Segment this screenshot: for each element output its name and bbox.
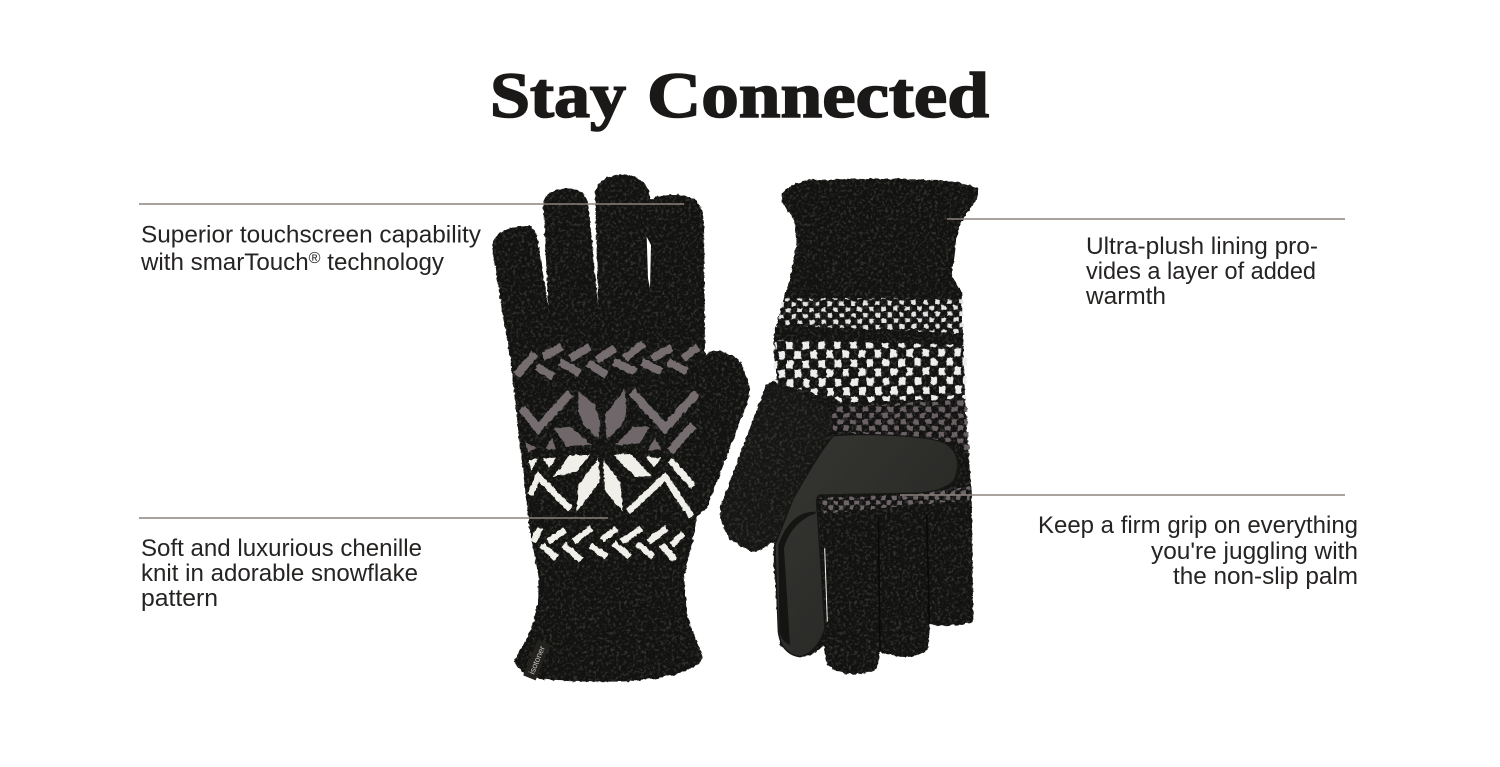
- purple check band: [832, 400, 969, 452]
- title: [490, 60, 989, 132]
- callout: chenille text: [141, 535, 422, 612]
- white zigzags: [530, 460, 693, 560]
- callout: grip text: you're juggling with: [1151, 538, 1358, 565]
- lower purple check band: [820, 487, 970, 513]
- gray zigzags: [522, 392, 697, 452]
- gray chevron band: [517, 343, 698, 377]
- title: Connected: [647, 60, 989, 132]
- callout: lining text: Ultra-plush lining pro-: [1086, 233, 1318, 260]
- callout: grip leader line: [900, 494, 1345, 496]
- infographic canvas: [139, 71, 1356, 682]
- callout: touchscreen text: [140, 222, 481, 276]
- callout: chenille leader line: [139, 517, 608, 519]
- thumb: [720, 384, 794, 552]
- white snowflake lower petals: [528, 453, 662, 512]
- brand tag: [523, 640, 550, 680]
- callout: grip text: [1038, 512, 1358, 590]
- callout: touchscreen leader line: [139, 203, 684, 205]
- gray snowflake upper petals: [525, 388, 662, 452]
- callout: grip text: Keep a firm grip on everything: [1038, 512, 1358, 539]
- finger gap: [647, 237, 651, 288]
- title: Stay: [490, 60, 626, 132]
- callout: touchscreen text: with smarTouch: [141, 249, 308, 276]
- finger separations: [878, 515, 929, 652]
- callout: chenille text: pattern: [141, 585, 218, 612]
- callout: touchscreen text: technology: [321, 249, 444, 276]
- callout: touchscreen text: ®: [309, 250, 321, 267]
- white check band 2: [773, 340, 967, 402]
- white check band 1: [778, 298, 963, 333]
- brand tag: isotoner: [526, 644, 547, 676]
- callout: touchscreen text: Superior touchscreen capability: [141, 222, 481, 248]
- callout: lining text: warmth: [1085, 283, 1166, 310]
- callout: grip text: the non-slip palm: [1173, 563, 1358, 590]
- left glove: snowflake knit back of hand: [480, 165, 760, 685]
- leather palm patch: [775, 435, 958, 657]
- callout: chenille text: Soft and luxurious chenille: [141, 535, 422, 562]
- finger gap: [825, 548, 827, 622]
- right glove: palm with check bands and leather grip: [720, 178, 978, 675]
- callout: chenille text: knit in adorable snowflake: [141, 560, 418, 587]
- callout: lining text: [1085, 233, 1318, 310]
- callout: lining text: vides a layer of added: [1086, 258, 1316, 285]
- callout: lining leader line: [947, 218, 1345, 220]
